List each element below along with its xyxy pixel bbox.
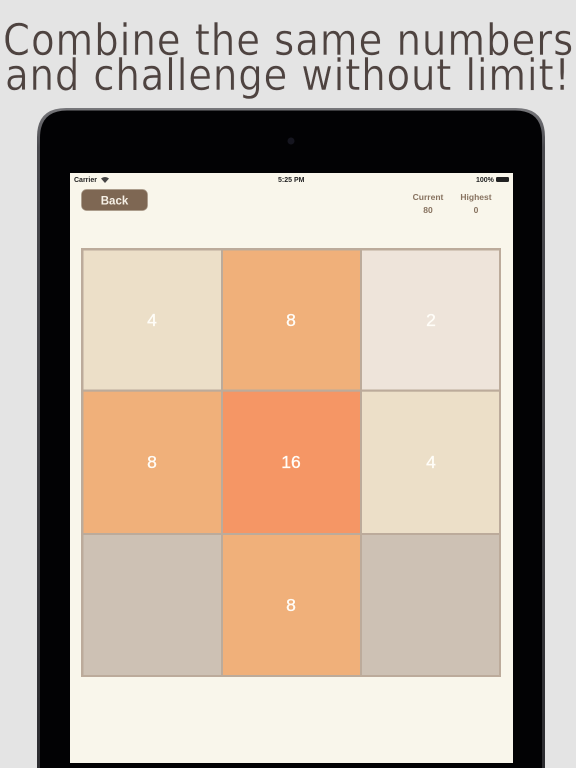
- tile: 4: [362, 392, 499, 533]
- tile: 2: 2: [426, 310, 436, 330]
- icon: camera: [288, 138, 294, 144]
- status bar: Carrier: [74, 177, 97, 184]
- title: [3, 15, 573, 101]
- tile: 8: [223, 535, 360, 675]
- highest score: [460, 192, 492, 215]
- tile: 8: 8: [147, 452, 157, 472]
- status bar: 5:25 PM: [278, 177, 305, 184]
- highest score: 0: [474, 205, 479, 215]
- tile: 16: [223, 392, 360, 533]
- back button: [82, 190, 148, 210]
- tile: 8: 8: [286, 595, 296, 615]
- screen: [70, 173, 513, 763]
- tile: 16: 16: [281, 452, 301, 472]
- title: Combine the same numbers: [3, 15, 573, 66]
- tile: 8: 8: [286, 310, 296, 330]
- tile: empty: [362, 535, 499, 675]
- back button: Back: [101, 196, 129, 208]
- current score: [413, 192, 444, 215]
- tile: 4: 4: [426, 452, 436, 472]
- status bar: 100%: [476, 177, 495, 184]
- game board: [81, 248, 501, 677]
- current score: 80: [423, 205, 433, 215]
- title: and challenge without limit!: [5, 50, 570, 101]
- tile: 4: [84, 250, 221, 390]
- tile: 8: [84, 392, 221, 533]
- tablet device: [37, 108, 545, 768]
- highest score: Highest: [460, 192, 492, 202]
- tile: 8: [223, 250, 360, 390]
- tile: 4: 4: [147, 310, 157, 330]
- status bar: [74, 177, 509, 184]
- current score: Current: [413, 192, 444, 202]
- tile: 2: [362, 250, 499, 390]
- tile: empty: [84, 535, 221, 675]
